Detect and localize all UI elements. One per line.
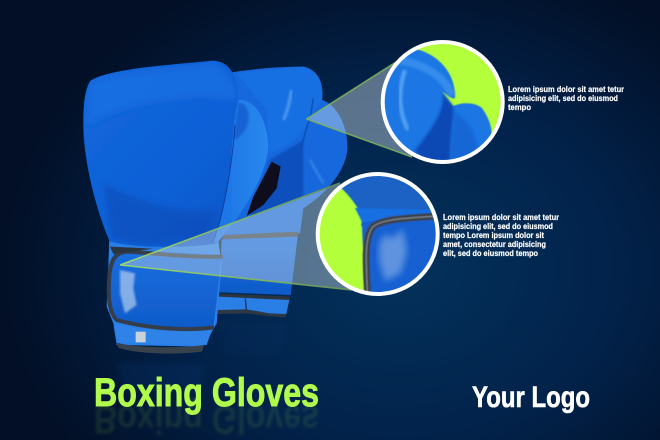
text block: upper callout [508, 85, 624, 112]
lower cuff [114, 324, 212, 345]
detail circle: glove thumb [380, 40, 505, 164]
zoom beam: lower detail [120, 183, 352, 290]
back cuff band [223, 232, 298, 239]
text block: lower callout: amet, consectetur adipisicing [443, 240, 546, 249]
text block: lower callout [443, 213, 559, 258]
text block: lower callout: tempo Lorem ipsum dolor sit [443, 231, 544, 240]
lace [247, 162, 281, 216]
front glove [83, 61, 268, 354]
text block: lower callout: elit, sed do eiusmod tempo [443, 249, 538, 258]
text block: upper callout: tempo [508, 103, 531, 112]
back glove [217, 67, 347, 317]
back strap [219, 237, 298, 295]
zoom beam: upper detail [306, 57, 412, 157]
detail circle: wrist strap [317, 170, 440, 300]
logo text: Your Logo [472, 381, 590, 414]
boxing gloves photo [83, 61, 347, 354]
text block: upper callout: Lorem ipsum dolor sit amet tetur [508, 85, 624, 94]
text block: lower callout: Lorem ipsum dolor sit amet tetur [443, 213, 559, 222]
front strap [108, 252, 222, 330]
title reflection: Boxing Gloves [94, 397, 319, 440]
title: Boxing Gloves [94, 371, 319, 415]
text block: lower callout: adipisicing elit, sed do eiusmod [443, 222, 553, 231]
glove reflection [116, 320, 288, 390]
text block: upper callout: adipisicing elit, sed do eiusmod [508, 94, 618, 103]
